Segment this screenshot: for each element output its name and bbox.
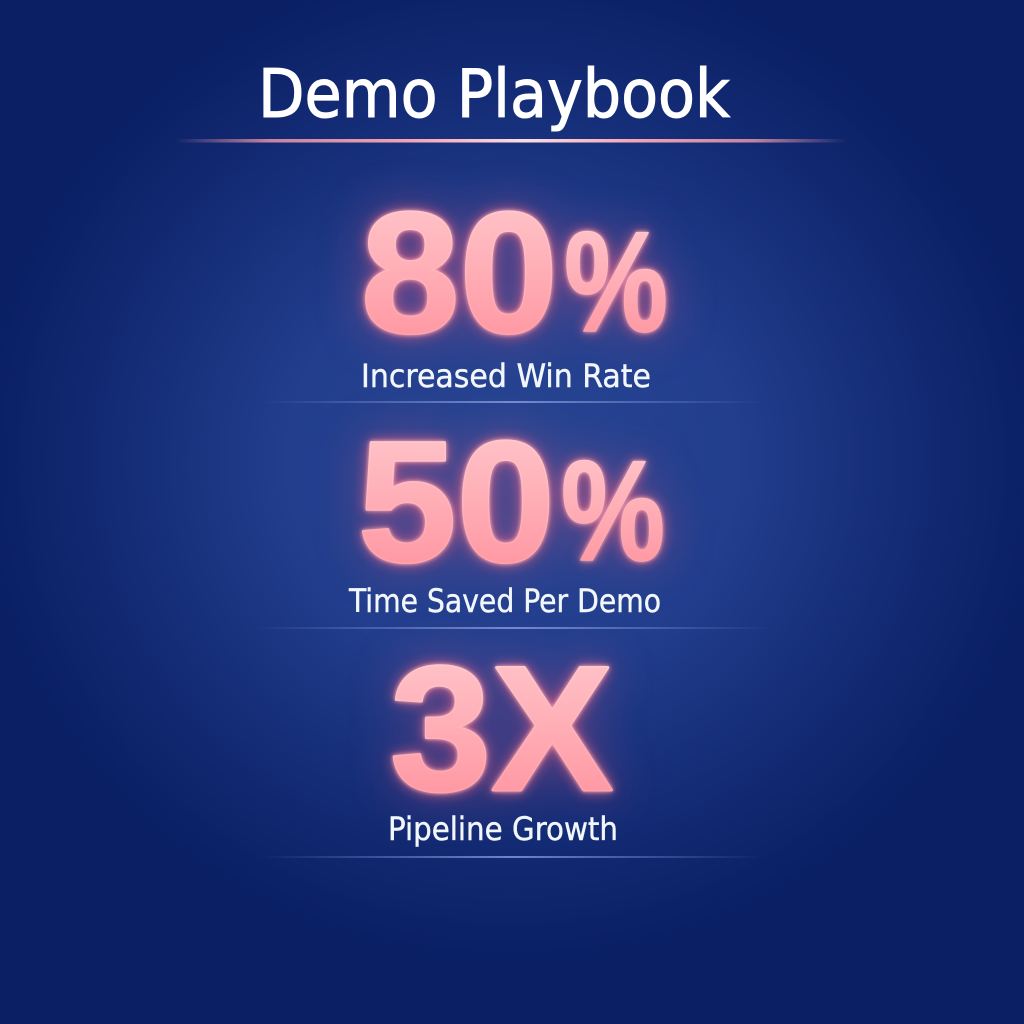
label: Pipeline Growth: Pipeline Growth [388, 810, 618, 848]
stat: 80%: % [564, 203, 668, 362]
divider [255, 627, 771, 629]
stat: 50%: % [561, 432, 665, 591]
divider [262, 401, 762, 403]
stat: 3X: 3X [390, 629, 613, 828]
label: Increased Win Rate: Increased Win Rate [361, 357, 651, 395]
stat: 80% [361, 177, 668, 369]
title: Demo Playbook [258, 55, 730, 133]
title underline [175, 139, 847, 142]
stat: 50%: 50 [358, 406, 555, 598]
divider [262, 856, 762, 858]
stat: 80%: 80 [361, 177, 558, 369]
stat: 50% [358, 406, 665, 598]
label: Time Saved Per Demo: Time Saved Per Demo [348, 582, 661, 620]
